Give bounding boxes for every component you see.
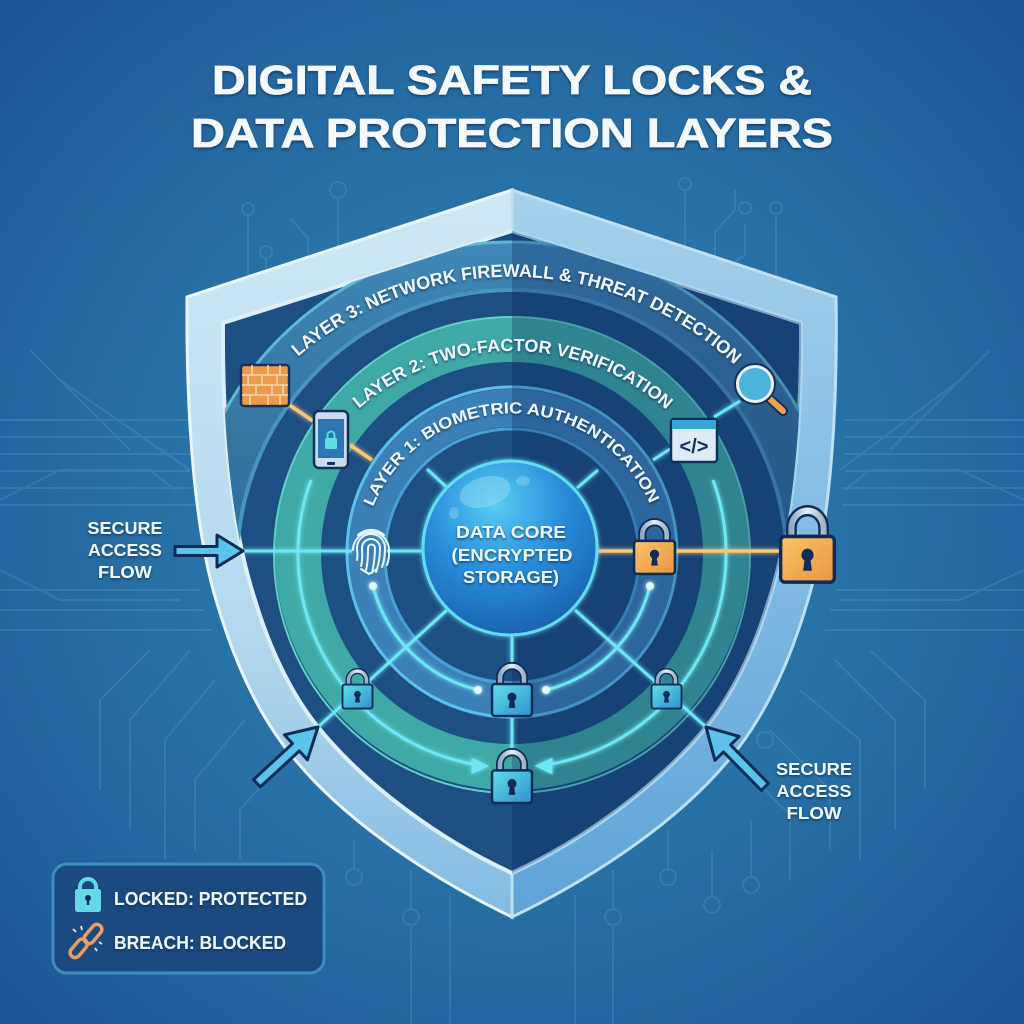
- label: secure access flow left: FLOW: [98, 562, 152, 582]
- core label: (ENCRYPTED: [452, 545, 572, 565]
- core highlight: [456, 471, 514, 513]
- icon: code window: </>: [680, 436, 708, 458]
- layer 3 ring: [224, 244, 800, 536]
- label: secure access flow right: SECURE: [776, 759, 852, 779]
- arrow: lower right access: [694, 715, 777, 799]
- breach lines: [288, 404, 779, 551]
- core label: [452, 522, 572, 587]
- shield inner field: [223, 231, 801, 873]
- icon: fingerprint: [353, 530, 389, 574]
- icon: teal lock left: [342, 671, 372, 708]
- title: DATA PROTECTION LAYERS: [191, 110, 833, 156]
- flow endpoint dots: [369, 582, 654, 694]
- radial connectors: [318, 401, 740, 748]
- legend: [53, 864, 324, 973]
- icon: teal lock right: [652, 671, 682, 708]
- layer 3 label: LAYER 3: NETWORK FIREWALL & THREAT DETECTION: [290, 264, 742, 366]
- layer 1 flow arcs: [373, 586, 650, 690]
- icon: orange lock large: [781, 511, 834, 582]
- layer 2 ring: [298, 339, 726, 767]
- arc labels: [290, 264, 742, 508]
- label: secure access flow left: ACCESS: [88, 540, 162, 560]
- layer 2 flow arrowheads: [473, 760, 551, 772]
- horizontal access line: [243, 550, 424, 552]
- right half shade: [512, 231, 801, 873]
- shield: [187, 190, 836, 917]
- label: secure access flow left: [88, 518, 162, 582]
- icon: orange lock small: [634, 522, 675, 574]
- layer 2 flow arcs: [298, 480, 726, 765]
- legend lock icon: [75, 879, 101, 912]
- legend labels: [114, 888, 307, 953]
- shield inner edge right: [512, 231, 801, 873]
- label: secure access flow right: [776, 759, 852, 823]
- arrow: lower left access: [245, 714, 330, 796]
- label: secure access flow left: SECURE: [88, 518, 162, 538]
- icon: magnifier: [735, 364, 783, 411]
- data core: [423, 461, 597, 635]
- protection rings: [224, 231, 801, 873]
- legend broken chain icon: [68, 922, 104, 960]
- legend labels: BREACH: BLOCKED: [114, 932, 286, 953]
- layer 1 ring: [366, 408, 658, 700]
- icon: code window: [671, 419, 717, 462]
- shield outer rim right: [512, 190, 836, 917]
- label: secure access flow right: FLOW: [786, 803, 842, 823]
- icon: phone with lock: [314, 411, 348, 468]
- legend labels: LOCKED: PROTECTED: [114, 888, 307, 909]
- shield outer rim left: [187, 190, 512, 917]
- title: DIGITAL SAFETY LOCKS &: [212, 57, 812, 103]
- arrow: left access: [175, 535, 243, 567]
- core label: STORAGE): [463, 567, 559, 587]
- icon: teal lock lower centre: [492, 752, 532, 803]
- layer 1 label: LAYER 1: BIOMETRIC AUTHENTICATION: [362, 402, 660, 508]
- flow lines: [243, 401, 740, 772]
- title: [191, 57, 833, 156]
- layer 2 label: LAYER 2: TWO-FACTOR VERIFICATION: [351, 338, 674, 412]
- icon: brick firewall: [241, 365, 289, 406]
- core label: DATA CORE: [456, 522, 566, 542]
- label: secure access flow right: ACCESS: [776, 781, 852, 801]
- icon: teal lock upper centre: [492, 666, 532, 716]
